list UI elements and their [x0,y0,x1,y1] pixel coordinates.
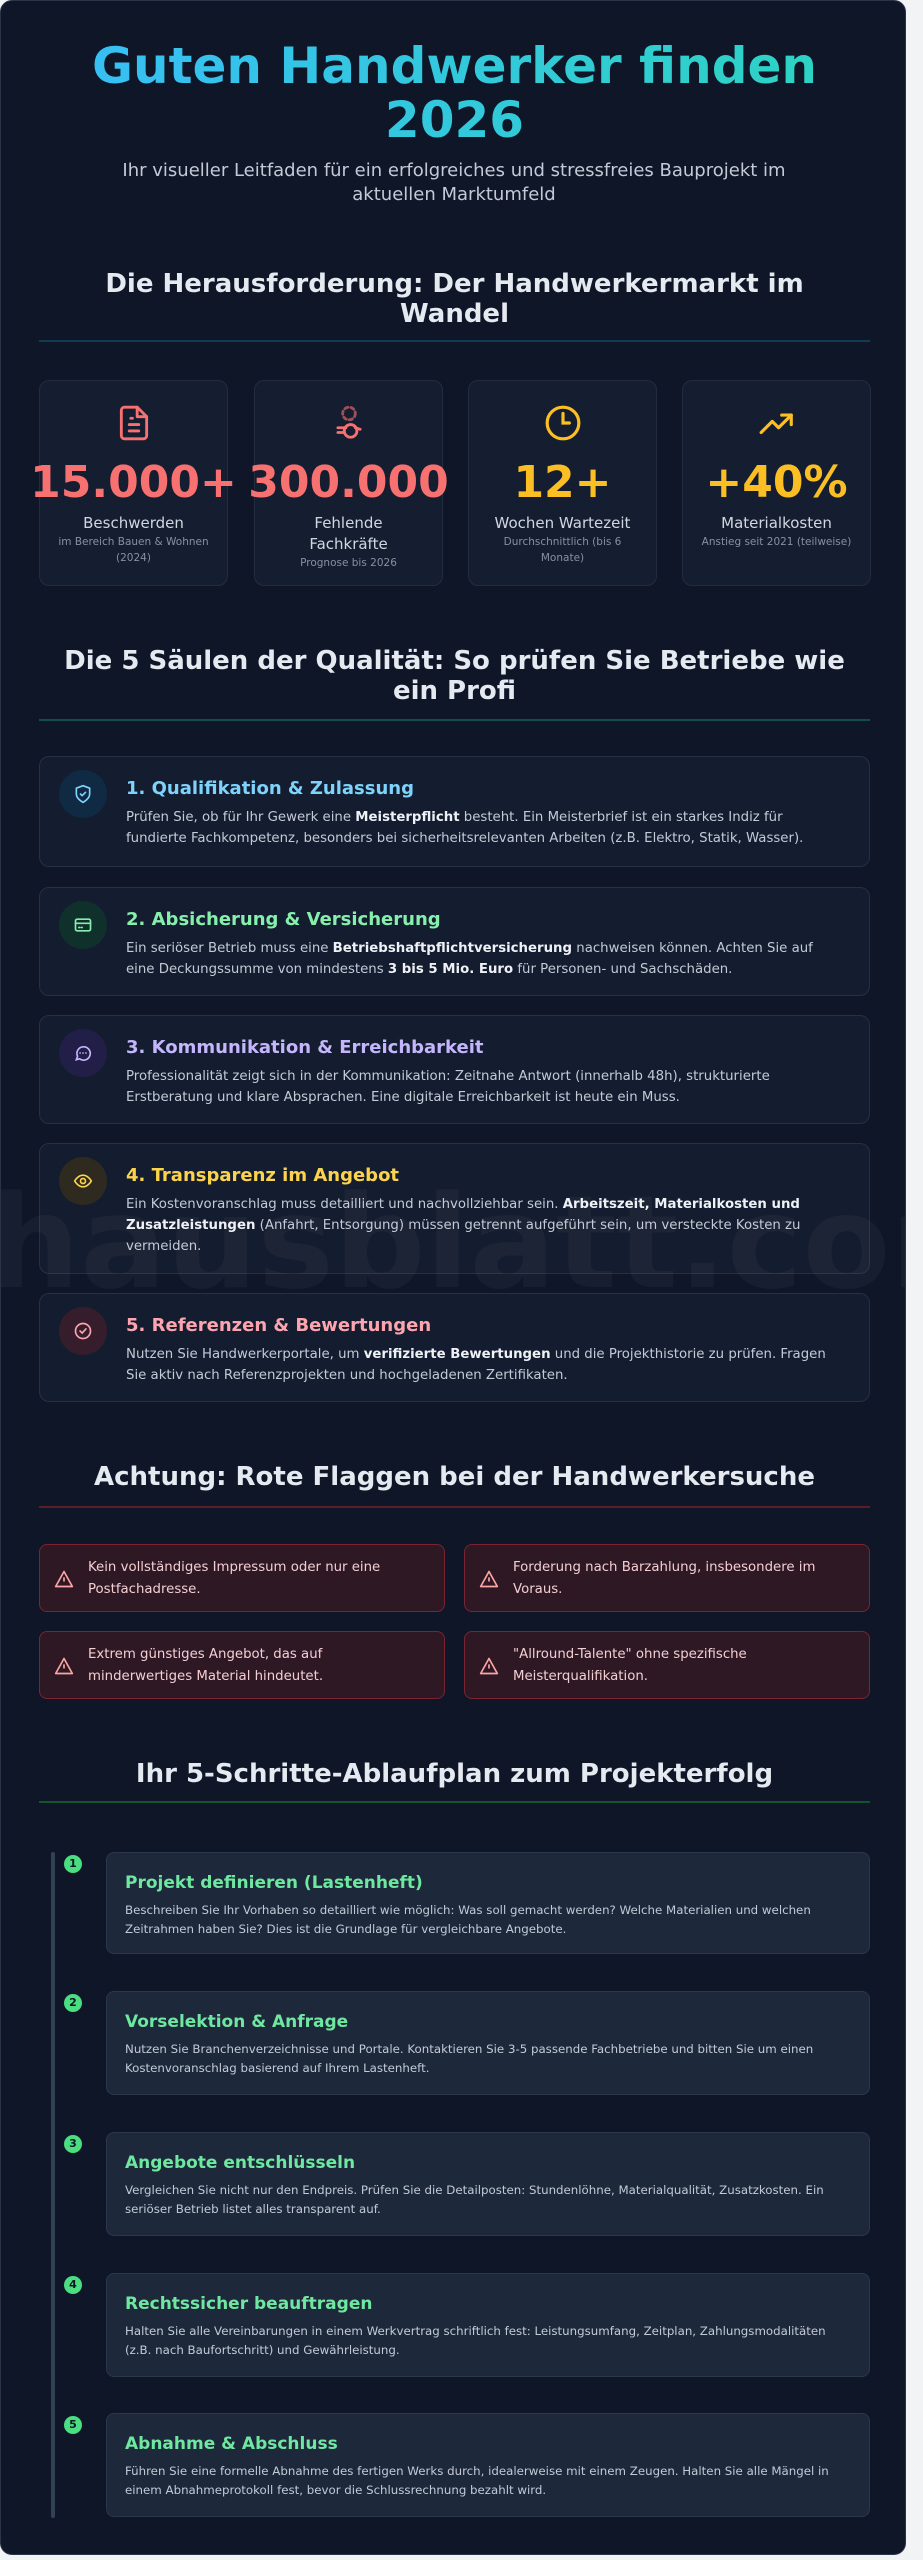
step 1: 1 [69,1857,77,1870]
step 5 [64,2416,82,2434]
pillar 3: 3. Kommunikation & Erreichbarkeit [126,1037,484,1058]
stat card: Beschwerden: (2024) [116,552,151,564]
icon: document [120,406,148,440]
heading: Ablaufplan: Ihr 5-Schritte-Ablaufplan zum Projekterfolg [136,1759,773,1789]
pillar 4: 4. Transparenz im Angebot [126,1165,399,1186]
pillar 2 [39,887,870,996]
stat card: Beschwerden [39,380,228,586]
main frame: Halten Sie alle Vereinbarungen in einem Werkvertrag schriftlich fest: Leistungsumfang, Zeitplan, Zahlungsmodalitäten (z.B. nach Baufortschritt) und Gewährleistung. [125,2324,826,2357]
flag 3: Extrem günstiges Angebot, das auf minderwertiges Material hindeutet. [88,1647,323,1684]
stat card: Wartezeit: 12+ [513,457,612,508]
main frame: Vergleichen Sie nicht nur den Endpreis. Prüfen Sie die Detailposten: Stundenlöhne, Materialqualität, Zusatzkosten. Ein seriöser Betrieb listet alles transparent auf. [125,2183,824,2216]
flag 1 [39,1544,445,1612]
main frame: Angebote entschlüsseln [125,2153,355,2173]
icon: chat [59,1029,107,1077]
stat card: Beschwerden: im Bereich Bauen & Wohnen [58,536,209,548]
main frame: Rechtssicher beauftragen [125,2294,372,2314]
stat card: Beschwerden: 15.000+ [30,457,237,508]
title: 2026 [385,91,524,149]
main frame: Nutzen Sie Branchenverzeichnisse und Portale. Kontaktieren Sie 3-5 passende Fachbetriebe und bitten Sie um einen Kostenvoranschlag basierend auf Ihrem Lastenheft. [125,2042,813,2075]
flag 2 [464,1544,870,1612]
step 4 [64,2276,82,2294]
step 3 [64,2135,82,2153]
stat card: Wartezeit: Monate) [541,552,584,564]
heading: Rote Flaggen: Achtung: Rote Flaggen bei der Handwerkersuche [94,1462,815,1492]
stat card: Fachkräfte: Fachkräfte [309,535,388,553]
flag 4 [464,1631,870,1699]
stat card: Fachkräfte [254,380,443,586]
step 2: 2 [69,1996,77,2009]
pillar 4: Ein Kostenvoranschlag muss detailliert und nachvollziehbar sein. Arbeitszeit, Materialkosten und Zusatzleistungen (Anfahrt, Entsorgung) müssen getrennt aufgeführt sein, um versteckte Kosten zu vermeiden. [126,1197,800,1254]
stat card: Fachkräfte: 300.000 [248,457,449,508]
step 4: 4 [69,2278,77,2291]
step 5: 5 [69,2418,77,2431]
icon: card [59,901,107,949]
main frame: Vorselektion & Anfrage [125,2012,348,2032]
icon: shield [59,770,107,818]
stat card: Wartezeit: Wochen Wartezeit [495,514,630,532]
icon: trending up [760,413,793,434]
pillar 4 [39,1143,870,1274]
pillar 2: 2. Absicherung & Versicherung [126,909,441,930]
pillar 1: Prüfen Sie, ob für Ihr Gewerk eine Meisterpflicht besteht. Ein Meisterbrief ist ein starkes Indiz für fundierte Fachkompetenz, besonders bei sicherheitsrelevanten Arbeiten (z.B. Elektro, Statik, Wasser). [126,810,803,846]
icon: person [336,406,362,439]
pillar 1 [39,756,870,867]
pillar 5 [39,1293,870,1402]
flag 4: "Allround-Talente" ohne spezifische Meisterqualifikation. [513,1647,747,1684]
step 3: 3 [69,2137,77,2150]
title: Guten Handwerker finden [92,37,817,95]
subtitle: Ihr visueller Leitfaden für ein erfolgreiches und stressfreies Bauprojekt im aktuellen Marktumfeld [122,160,786,205]
pillar 3: Professionalität zeigt sich in der Kommunikation: Zeitnahe Antwort (innerhalb 48h), strukturierte Erstberatung und klare Absprachen. Eine digitale Erreichbarkeit ist heute ein Muss. [126,1069,770,1105]
timeline line [51,1852,55,2518]
stat card: Beschwerden: Beschwerden [83,514,184,532]
stat card: Fachkräfte: Fehlende [314,514,383,532]
pillar 1: 1. Qualifikation & Zulassung [126,778,414,799]
main frame: Projekt definieren (Lastenheft) [125,1873,423,1893]
heading: 5 Säulen: Die 5 Säulen der Qualität: So prüfen Sie Betriebe wie ein Profi [64,646,845,706]
pillar 5: Nutzen Sie Handwerkerportale, um verifizierte Bewertungen und die Projekthistorie zu prüfen. Fragen Sie aktiv nach Referenzprojekten und hochgeladenen Zertifikaten. [126,1347,826,1383]
step 1 [64,1855,82,1873]
stat card: Materialkosten: Anstieg seit 2021 (teilweise) [702,536,851,548]
flag 1: Kein vollständiges Impressum oder nur eine Postfachadresse. [88,1560,380,1597]
step 2 [64,1994,82,2012]
stat card: Fachkräfte: Prognose bis 2026 [300,557,397,569]
main frame: Führen Sie eine formelle Abnahme des fertigen Werks durch, idealerweise mit einem Zeugen. Halten Sie alle Mängel in einem Abnahmeprotokoll fest, bevor die Schlussrechnung bezahlt wird. [125,2464,829,2497]
main frame: Abnahme & Abschluss [125,2434,338,2454]
title [21,39,888,147]
pillar 2: Ein seriöser Betrieb muss eine Betriebshaftpflichtversicherung nachweisen können. Achten Sie auf eine Deckungssumme von mindestens 3 bis 5 Mio. Euro für Personen- und Sachschäden. [126,941,813,977]
icon: eye [59,1157,107,1205]
stat card: Materialkosten: Materialkosten [721,514,832,532]
flag 2: Forderung nach Barzahlung, insbesondere im Voraus. [513,1560,815,1597]
pillar 5: 5. Referenzen & Bewertungen [126,1315,431,1336]
icon: clock [546,406,580,440]
main frame: Beschreiben Sie Ihr Vorhaben so detailliert wie möglich: Was soll gemacht werden? Welche Materialien und welchen Zeitrahmen haben Sie? Dies ist die Grundlage für vergleichbare Angebote. [125,1903,811,1936]
stat card: Wartezeit [468,380,657,586]
pillar 3 [39,1015,870,1124]
stat card: Materialkosten: +40% [705,457,848,508]
flag 3 [39,1631,445,1699]
icon: check circle [59,1307,107,1355]
heading: Herausforderung: Die Herausforderung: Der Handwerkermarkt im Wandel [105,269,804,329]
stat card: Wartezeit: Durchschnittlich (bis 6 [504,536,621,548]
stat card: Materialkosten [682,380,871,586]
